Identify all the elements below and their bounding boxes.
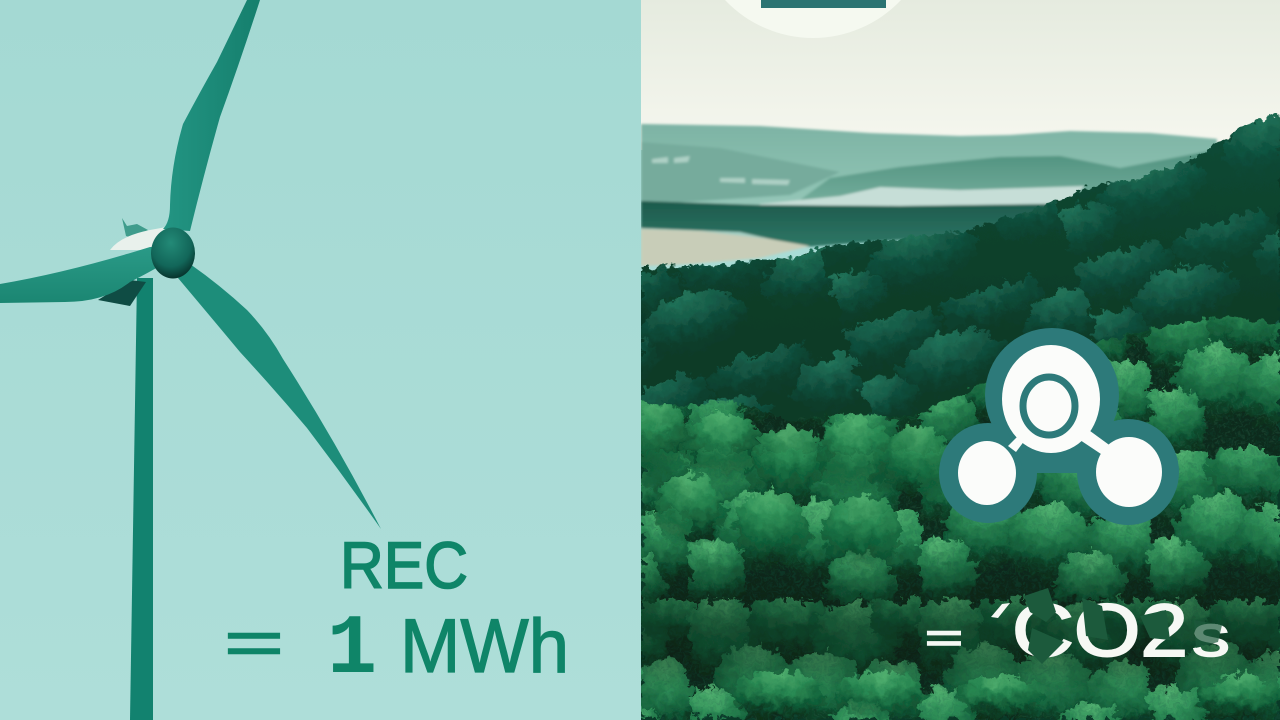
- panel: right forest photo: [619, 0, 1280, 720]
- molecule teal backing: [939, 328, 1179, 525]
- equals sign right: =: [925, 614, 963, 661]
- hub: [151, 228, 195, 278]
- left hill shade: [641, 142, 840, 205]
- far hills: [641, 124, 1217, 240]
- shadow under blade: [98, 280, 146, 306]
- sky: [641, 0, 1280, 150]
- forest base colour: [641, 118, 1280, 720]
- farm field: [641, 229, 810, 266]
- panel background: [0, 0, 641, 720]
- molecule white shapes: [958, 345, 1162, 507]
- equals sign left: =: [224, 609, 284, 678]
- dark forest strip: [641, 201, 1050, 247]
- white town band: [760, 186, 1085, 208]
- left blade: [0, 247, 163, 303]
- bright lower forest: [619, 300, 1280, 720]
- distant landscape: [641, 124, 1217, 266]
- molecule center ring: [1023, 377, 1075, 435]
- white nacelle: [110, 226, 172, 250]
- dark upper forest: [641, 113, 1280, 416]
- heading: REC: REC: [340, 528, 468, 602]
- unit: MWh: MWh: [400, 604, 569, 689]
- white flecks: [652, 156, 790, 185]
- stray tick before C: [991, 603, 1010, 618]
- teal bar at top: [761, 0, 886, 8]
- leaf speckle: [641, 300, 1280, 720]
- icon: molecule: [939, 328, 1179, 525]
- canopy shading: [641, 545, 1280, 695]
- text: CO2s: s: [1192, 604, 1230, 669]
- nacelle sensor: [122, 218, 148, 238]
- text: CO2s: [991, 588, 1228, 664]
- icon: wind turbine: [0, 0, 381, 720]
- text: CO2s: CO2: [1012, 589, 1188, 672]
- upper blade: [163, 0, 260, 231]
- front row of tree crowns: [619, 400, 1280, 720]
- number: 1: 1: [327, 603, 377, 698]
- middle ridge: [802, 150, 1207, 200]
- sun circle: [725, 0, 901, 38]
- leaf overlays on text: [1024, 588, 1222, 664]
- panel: left wind turbine: [0, 0, 641, 720]
- right lower blade: [178, 264, 381, 529]
- turbine tower: [130, 278, 153, 720]
